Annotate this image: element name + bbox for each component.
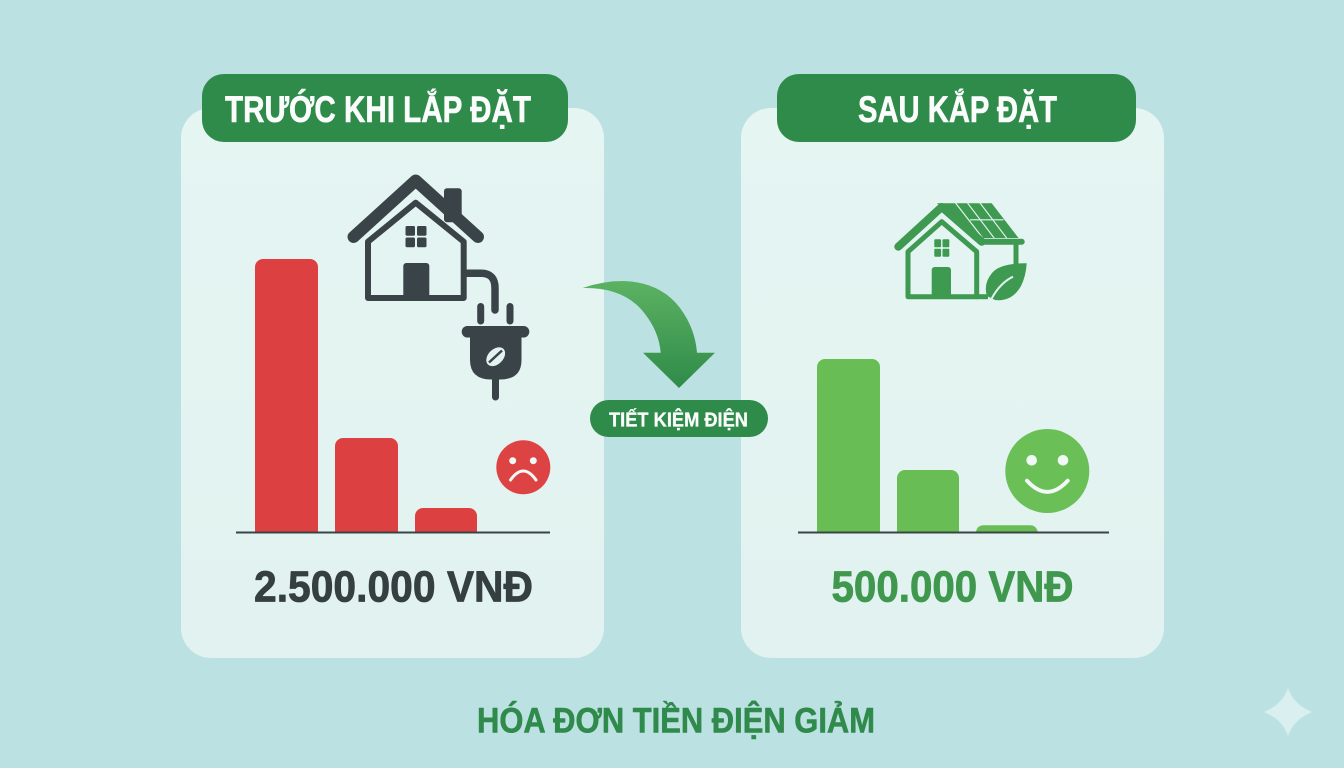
value: bill after installation: 500.000 VNĐ [832, 562, 1074, 612]
icon: happy face [1005, 429, 1089, 513]
panel: before installation [181, 74, 604, 658]
title: electricity bill reduced: HÓA ĐƠN TIỀN ĐIỆN GIẢM [477, 701, 875, 741]
value: bill before installation: 2.500.000 VNĐ [254, 562, 533, 612]
panel: after installation [741, 74, 1164, 658]
icon: sparkle watermark [1264, 688, 1312, 736]
heading: after installation [777, 74, 1136, 142]
label: energy saving: TIẾT KIỆM ĐIỆN [609, 408, 748, 432]
label: energy saving [590, 400, 768, 437]
heading: after installation: SAU KẮP ĐẶT [858, 88, 1057, 130]
icon: solar house with leaf [898, 203, 1027, 300]
icon: sad face [496, 440, 550, 494]
heading: before installation: TRƯỚC KHI LẮP ĐẶT [225, 88, 531, 130]
bar chart: after installation [798, 359, 1109, 534]
heading: before installation [202, 74, 568, 142]
arrow: from before to after [583, 281, 715, 388]
icon: house with power plug [354, 180, 529, 397]
bar chart: before installation [236, 259, 550, 534]
